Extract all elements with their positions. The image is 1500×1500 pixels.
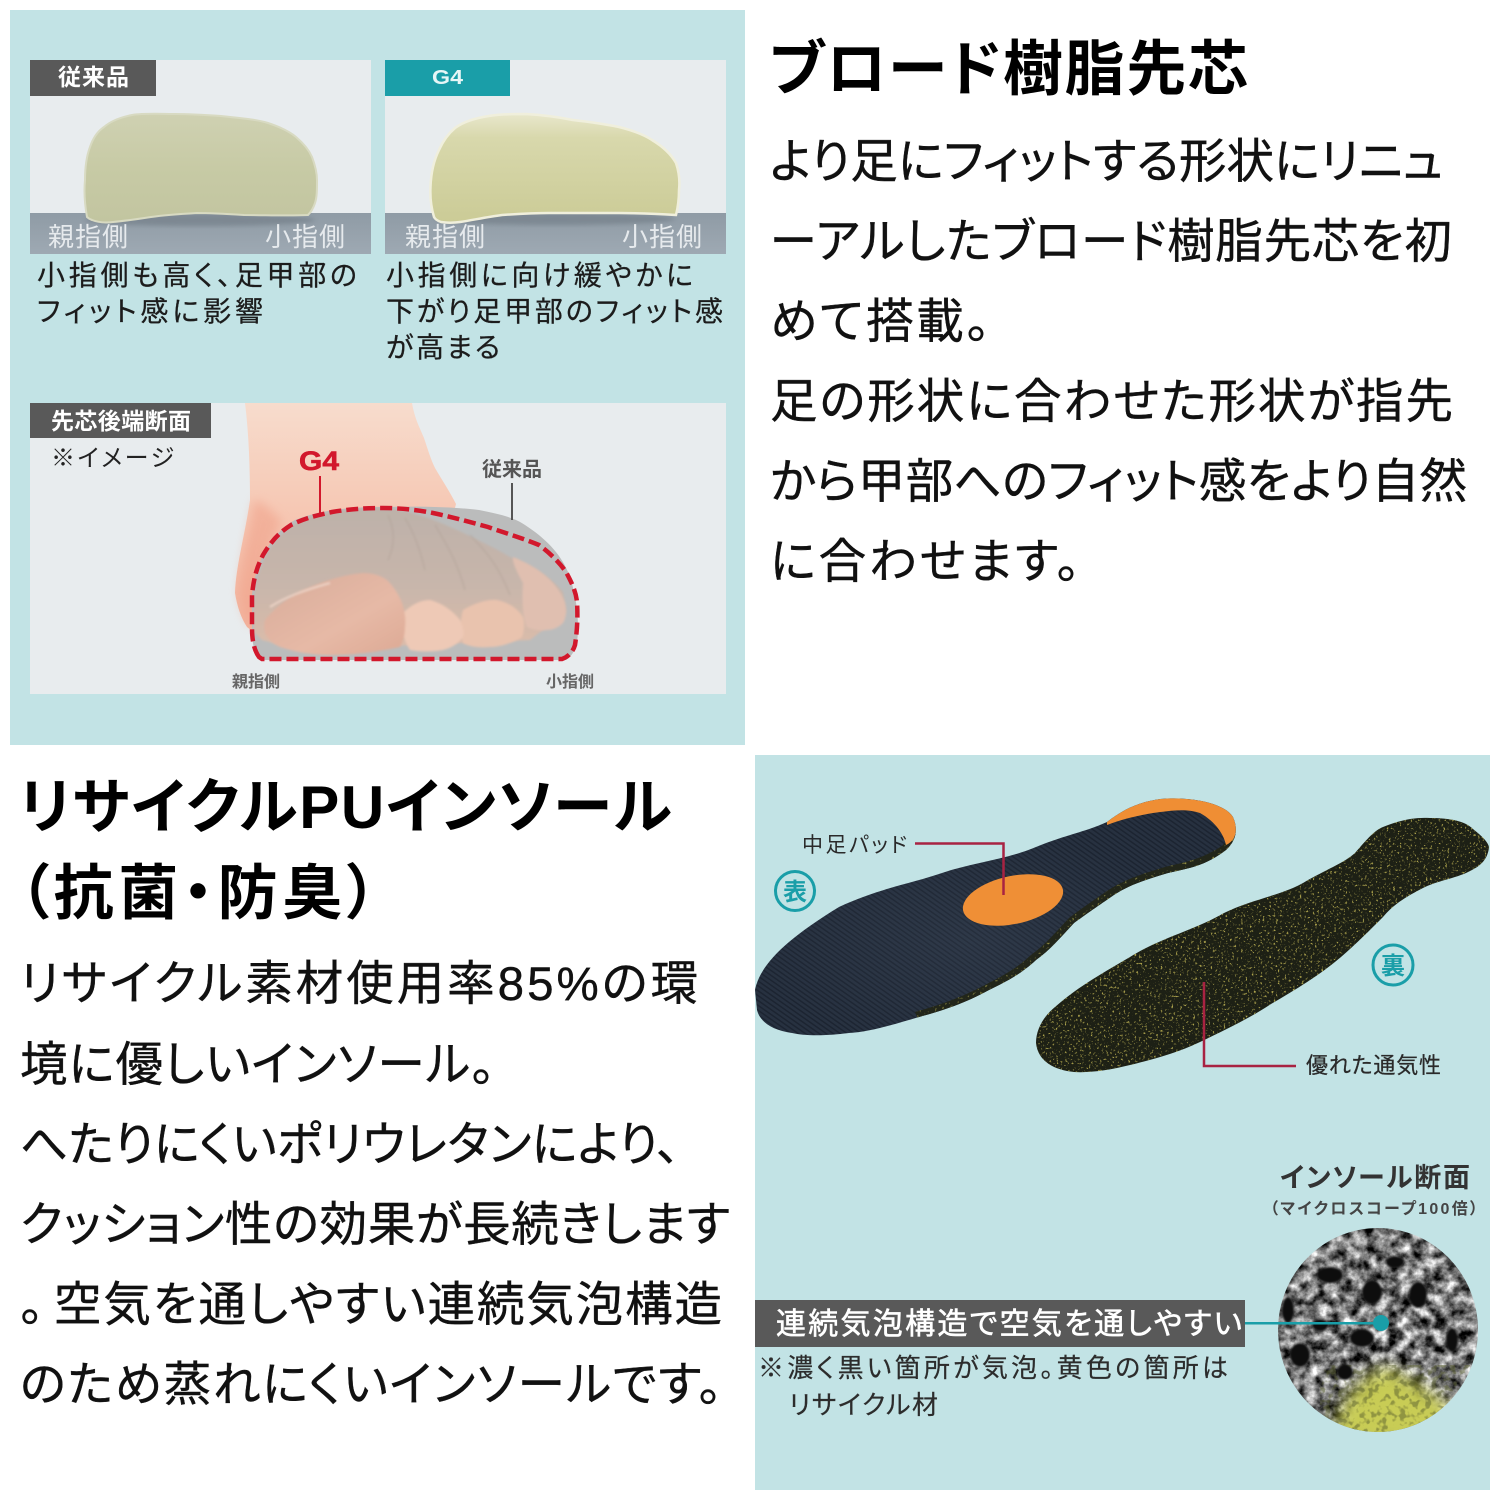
text block: toe cap description — [770, 136, 1467, 589]
band labels — [48, 222, 345, 252]
text block: insole description: へたりにくいポリウレタンにより、 — [20, 1119, 680, 1172]
text: conventional description: 小指側も高く、足甲部の — [37, 260, 357, 291]
heading: recycled PU insole — [19, 774, 672, 927]
panel: toe cap comparison — [10, 10, 745, 745]
band labels: 親指側 — [48, 222, 128, 252]
callout bar: open-cell structure: 連続気泡構造で空気を通しやすい — [776, 1308, 1242, 1341]
heading: insole cross section — [1270, 1163, 1478, 1218]
label: conventional tag — [30, 60, 156, 96]
text block: toe cap description: に合わせます。 — [770, 536, 1080, 589]
icon: front mark: 表 — [783, 879, 807, 906]
text block: insole description — [20, 958, 730, 1412]
icon: back mark: 裏 — [1381, 952, 1405, 980]
text: conventional description — [37, 260, 357, 327]
heading: recycled PU insole: リサイクルPUインソール — [19, 774, 672, 841]
callout: G4: G4 — [299, 446, 339, 476]
label: big toe side: 親指側 — [232, 673, 280, 691]
heading: recycled PU insole: （抗菌・防臭） — [19, 860, 377, 927]
image: heel cup — [1107, 798, 1236, 845]
band labels: 小指側 — [265, 222, 345, 252]
icon: front mark — [776, 872, 814, 910]
label: little toe side: 小指側 — [546, 673, 594, 691]
text block: toe cap description: より足にフィットする形状にリニュ — [770, 136, 1443, 189]
text block: toe cap description: から甲部へのフィット感をより自然 — [770, 456, 1467, 509]
text block: insole description: 境に優しいインソール。 — [20, 1039, 495, 1092]
text: G4 description — [386, 260, 723, 363]
image: toes — [264, 557, 566, 655]
panel: cross section diagram — [30, 403, 726, 694]
note: bubbles and recycled material: リサイクル材 — [789, 1390, 938, 1420]
heading: insole cross section: （マイクロスコープ100倍） — [1270, 1200, 1478, 1218]
panel: G4 toe cap — [385, 60, 726, 254]
callout: G4 — [299, 446, 339, 515]
label: G4 tag: G4 — [432, 67, 464, 89]
note: image only: ※イメージ — [51, 445, 174, 472]
image: metatarsal pad — [958, 866, 1068, 934]
text block: toe cap description: 足の形状に合わせた形状が指先 — [770, 376, 1453, 429]
text block: toe cap description: ーアルしたブロード樹脂先芯を初 — [770, 216, 1452, 269]
callout: metatarsal pad: 中足パッド — [802, 834, 907, 857]
text block: toe cap description: めて搭載。 — [770, 296, 990, 349]
panel: conventional toe cap — [30, 60, 371, 254]
text block: insole description: リサイクル素材使用率85%の環 — [20, 958, 698, 1011]
image: foot under toe cap — [254, 508, 566, 650]
text: G4 description: 下がり足甲部のフィット感 — [386, 296, 723, 327]
icon: back mark — [1373, 945, 1413, 985]
band labels: 小指側 — [622, 222, 702, 252]
image: microscope cross section — [1278, 1228, 1478, 1432]
note: bubbles and recycled material: ※濃く黒い箇所が気泡。黄色の箇所は — [758, 1353, 1228, 1383]
text: conventional description: フィット感に影響 — [37, 296, 263, 327]
band labels: 親指側 — [405, 222, 485, 252]
text: G4 description: が高まる — [386, 332, 500, 363]
callout: metatarsal pad — [802, 834, 1004, 895]
label: section tag: 先芯後端断面 — [51, 408, 191, 434]
text block: insole description: 。 — [20, 1279, 44, 1332]
heading: insole cross section: インソール断面 — [1280, 1163, 1470, 1193]
midsole speckled edge — [910, 830, 1240, 1030]
note: bubbles and recycled material — [758, 1353, 1228, 1420]
callout bar: open-cell structure — [755, 1300, 1245, 1347]
image: G4 toe cap — [430, 114, 679, 223]
text: G4 description: 小指側に向け緩やかに — [386, 260, 693, 291]
connector: bar to microscope — [1245, 1315, 1389, 1331]
image: insole top side — [750, 795, 1240, 1040]
text block: insole description: 空気を通しやすい連続気泡構造 — [54, 1279, 722, 1332]
callout: conventional: 従来品 — [482, 458, 542, 481]
band labels — [405, 222, 702, 252]
panel: insole — [750, 755, 1495, 1490]
image: conventional toe cap — [84, 114, 317, 222]
image: insole bottom side — [1030, 810, 1495, 1075]
shape: conventional toe cap outline — [252, 507, 578, 660]
text block: insole description: クッション性の効果が長続きします — [20, 1199, 730, 1252]
image: foot creases — [388, 515, 510, 595]
callout: breathability — [1204, 982, 1441, 1078]
callout: conventional — [482, 458, 542, 520]
shape: G4 dashed outline — [252, 508, 577, 659]
text block: insole description: のため蒸れにくいインソールです。 — [20, 1359, 722, 1412]
label: conventional tag: 従来品 — [58, 64, 129, 90]
label: section tag — [30, 403, 211, 438]
image: foot and leg — [235, 403, 456, 640]
label: G4 tag — [385, 60, 510, 96]
callout: breathability: 優れた通気性 — [1306, 1053, 1441, 1078]
heading: broad resin toe cap: ブロード樹脂先芯 — [769, 36, 1248, 103]
